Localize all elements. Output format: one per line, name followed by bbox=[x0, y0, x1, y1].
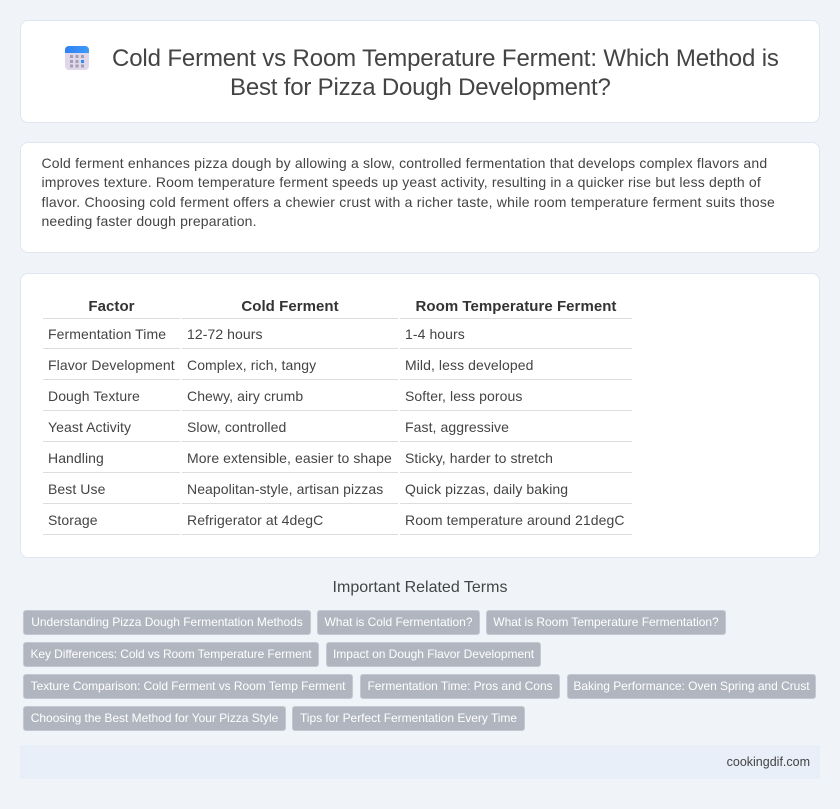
comparison table: Fast, aggressive bbox=[405, 419, 509, 435]
related terms tags: Fermentation Time: Pros and Cons bbox=[367, 679, 553, 693]
comparison table: Slow, controlled bbox=[187, 419, 286, 435]
comparison table: Sticky, harder to stretch bbox=[405, 450, 553, 466]
comparison table: Best Use bbox=[48, 481, 105, 497]
comparison table: Neapolitan-style, artisan pizzas bbox=[187, 481, 383, 497]
comparison table: Complex, rich, tangy bbox=[187, 357, 316, 373]
comparison table: Handling bbox=[48, 450, 104, 466]
title: Best for Pizza Dough Development? bbox=[230, 74, 611, 101]
comparison table: Chewy, airy crumb bbox=[187, 388, 303, 404]
icon: calendar bbox=[65, 46, 89, 70]
comparison table: Yeast Activity bbox=[48, 419, 131, 435]
description text: needing faster dough preparation. bbox=[42, 213, 257, 229]
footer bar bbox=[20, 745, 820, 779]
related terms tags: Understanding Pizza Dough Fermentation Methods bbox=[31, 615, 303, 629]
comparison table: Fermentation Time bbox=[48, 326, 166, 342]
description text: flavor. Choosing cold ferment offers a chewier crust with a richer taste, while room temperature ferment suits those bbox=[42, 194, 775, 210]
comparison table: 12-72 hours bbox=[187, 326, 263, 342]
related terms tags: Baking Performance: Oven Spring and Crust bbox=[573, 679, 810, 693]
description text: improves texture. Room temperature ferment speeds up yeast activity, resulting in a quicker rise but less depth of bbox=[42, 174, 761, 190]
comparison table: Softer, less porous bbox=[405, 388, 522, 404]
comparison table: Factor bbox=[88, 298, 135, 315]
description text: Cold ferment enhances pizza dough by allowing a slow, controlled fermentation that develops complex flavors and bbox=[42, 155, 767, 171]
title: Cold Ferment vs Room Temperature Ferment: Which Method is bbox=[112, 45, 779, 72]
comparison table bbox=[43, 298, 632, 535]
comparison table: Quick pizzas, daily baking bbox=[405, 481, 568, 497]
table card bbox=[20, 273, 820, 558]
description text bbox=[42, 155, 775, 229]
header card bbox=[20, 20, 820, 123]
description card bbox=[20, 142, 820, 253]
comparison table: Room Temperature Ferment bbox=[416, 298, 616, 315]
comparison table: Storage bbox=[48, 512, 98, 528]
related terms tags: What is Room Temperature Fermentation? bbox=[493, 615, 719, 629]
related terms tags: Tips for Perfect Fermentation Every Time bbox=[300, 711, 517, 725]
comparison table: Flavor Development bbox=[48, 357, 175, 373]
related terms tags: Choosing the Best Method for Your Pizza Style bbox=[31, 711, 278, 725]
related terms tags bbox=[23, 610, 816, 731]
related terms tags: Key Differences: Cold vs Room Temperature Ferment bbox=[30, 647, 312, 661]
related terms tags: What is Cold Fermentation? bbox=[325, 615, 472, 629]
related terms tags: Impact on Dough Flavor Development bbox=[333, 647, 534, 661]
comparison table: Dough Texture bbox=[48, 388, 140, 404]
comparison table: Refrigerator at 4degC bbox=[187, 512, 323, 528]
comparison table: Mild, less developed bbox=[405, 357, 533, 373]
footer source text: cookingdif.com bbox=[727, 755, 810, 769]
title bbox=[112, 45, 779, 101]
comparison table: Cold Ferment bbox=[241, 298, 339, 315]
comparison table: More extensible, easier to shape bbox=[187, 450, 392, 466]
related terms heading: Important Related Terms bbox=[333, 579, 507, 596]
comparison table: Room temperature around 21degC bbox=[405, 512, 625, 528]
comparison table: 1-4 hours bbox=[405, 326, 465, 342]
related terms tags: Texture Comparison: Cold Ferment vs Room Temp Ferment bbox=[31, 679, 345, 693]
